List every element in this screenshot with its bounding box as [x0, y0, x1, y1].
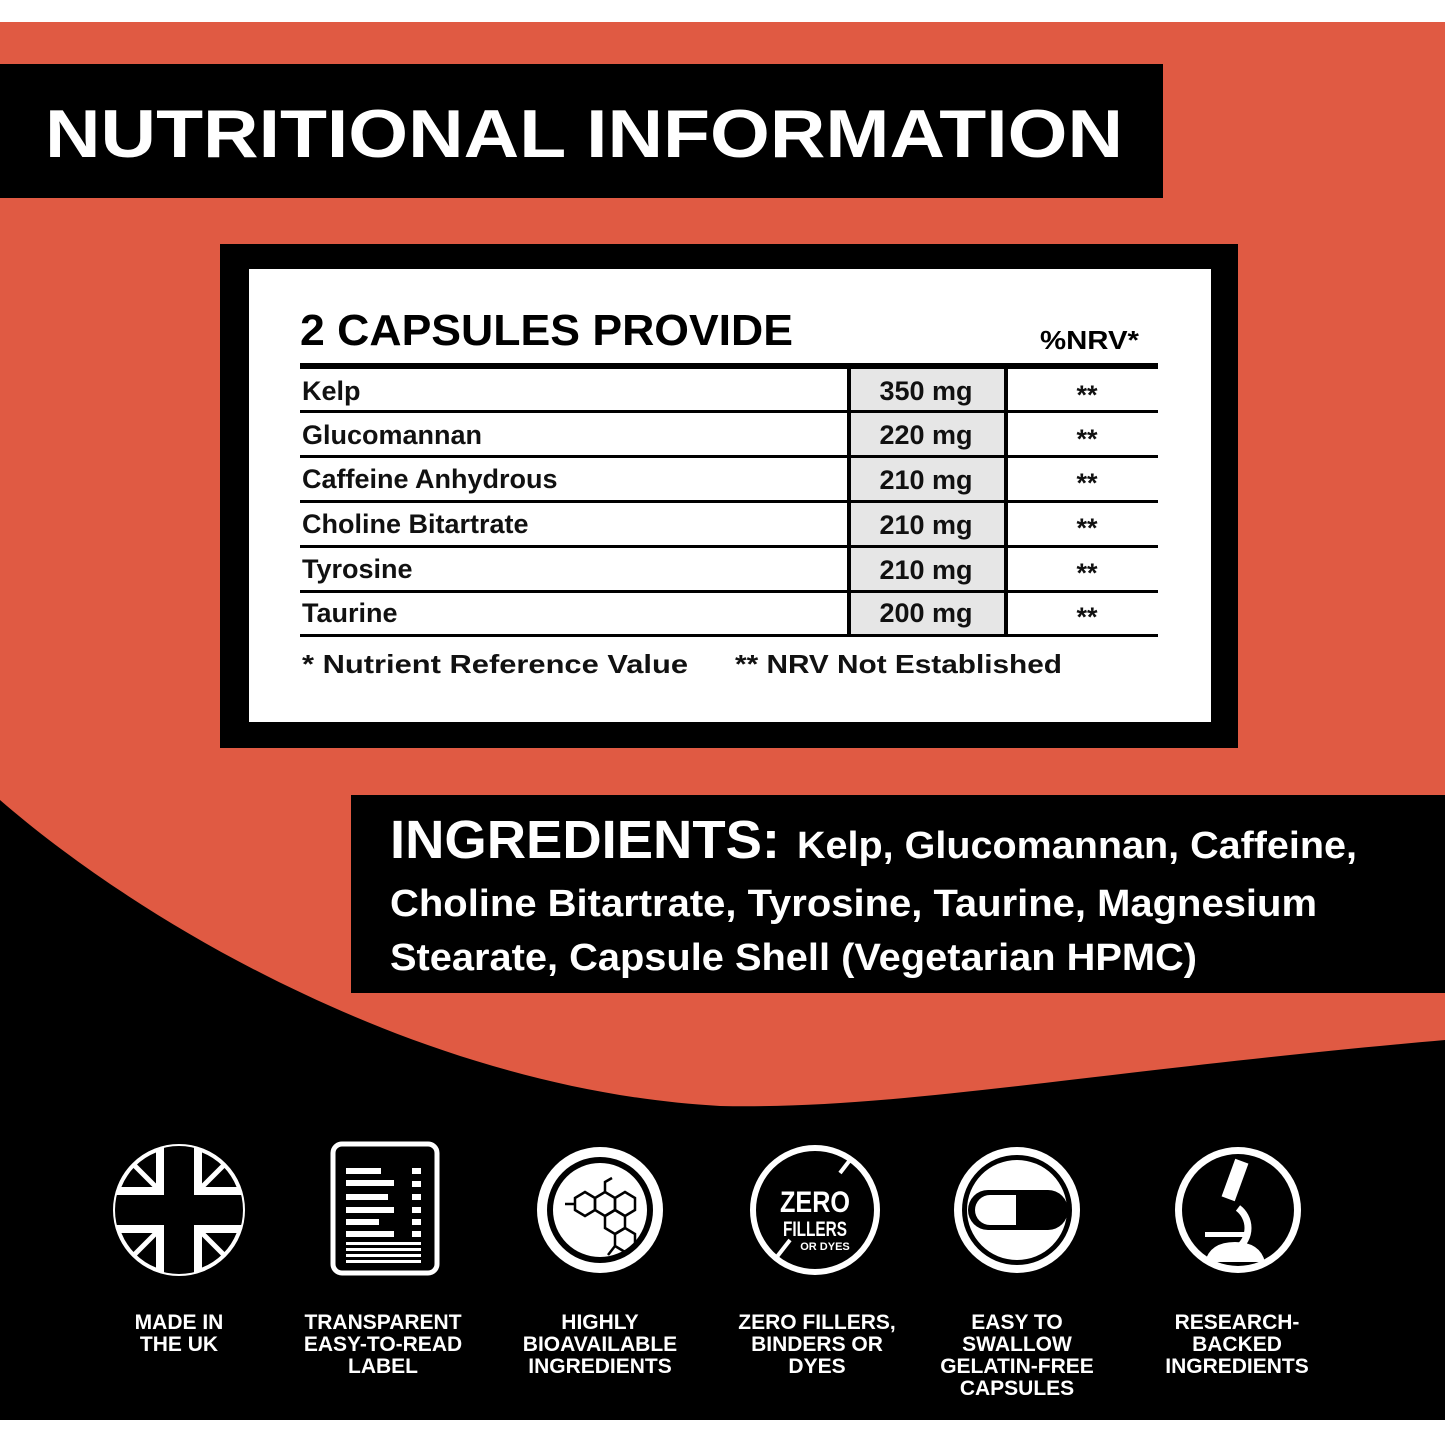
- feature labels: RESEARCH-: [1175, 1311, 1299, 1334]
- table rows: [302, 376, 1098, 632]
- panel: ingredients: INGREDIENTS:: [390, 810, 780, 870]
- title: [0, 64, 1163, 198]
- table heading: 2 CAPSULES PROVIDE: [300, 306, 793, 355]
- table rows: Taurine: [302, 598, 398, 628]
- table rows: Tyrosine: [302, 554, 413, 584]
- feature labels: INGREDIENTS: [1165, 1355, 1309, 1378]
- feature labels: [135, 1311, 1309, 1400]
- feature labels: EASY-TO-READ: [304, 1333, 462, 1356]
- icon: UK flag: [113, 1144, 245, 1276]
- feature labels: INGREDIENTS: [528, 1355, 672, 1378]
- table rows: Kelp: [302, 376, 361, 406]
- table rows: Caffeine Anhydrous: [302, 464, 558, 494]
- table rows: **: [1076, 602, 1098, 632]
- table rows: 200 mg: [879, 598, 973, 628]
- table rows: **: [1076, 513, 1098, 543]
- feature labels: TRANSPARENT: [304, 1311, 462, 1334]
- table rows: Choline Bitartrate: [302, 509, 529, 539]
- table rows: 350 mg: [879, 376, 973, 406]
- footnote: * Nutrient Reference Value: [302, 649, 688, 679]
- feature labels: DYES: [788, 1355, 846, 1378]
- panel: ingredients: Choline Bitartrate, Tyrosine, Taurine, Magnesium: [390, 883, 1317, 925]
- table rows: 210 mg: [879, 510, 973, 540]
- panel: ingredients: Stearate, Capsule Shell (Vegetarian HPMC): [390, 937, 1197, 979]
- feature labels: BACKED: [1192, 1333, 1282, 1356]
- feature labels: BIOAVAILABLE: [523, 1333, 677, 1356]
- icon: zero fillers: FILLERS: [783, 1218, 847, 1241]
- table rows: 210 mg: [879, 555, 973, 585]
- icon: microscope: [1175, 1147, 1301, 1273]
- title: NUTRITIONAL INFORMATION: [45, 96, 1123, 172]
- icon: zero fillers: ZERO: [780, 1186, 850, 1219]
- icon: zero fillers: [753, 1148, 877, 1272]
- table rows: 220 mg: [879, 420, 973, 450]
- feature labels: CAPSULES: [960, 1377, 1074, 1400]
- feature labels: MADE IN: [135, 1311, 223, 1334]
- nrv heading: %NRV*: [1040, 325, 1140, 355]
- feature labels: HIGHLY: [561, 1311, 639, 1334]
- table rows: Glucomannan: [302, 420, 482, 450]
- feature labels: BINDERS OR: [751, 1333, 883, 1356]
- feature labels: LABEL: [348, 1355, 418, 1378]
- icon: capsule: [954, 1147, 1080, 1273]
- table rows: **: [1076, 380, 1098, 410]
- panel: nutrition table: ** NRV Not Established: [735, 649, 1062, 679]
- table rows: **: [1076, 424, 1098, 454]
- table rows: **: [1076, 558, 1098, 588]
- table rows: 210 mg: [879, 465, 973, 495]
- table rows: **: [1076, 468, 1098, 498]
- feature labels: GELATIN-FREE: [940, 1355, 1094, 1378]
- icon: zero fillers: OR DYES: [800, 1241, 850, 1253]
- icon: molecule: [537, 1147, 663, 1273]
- feature labels: ZERO FILLERS,: [738, 1311, 896, 1334]
- icon: label: [333, 1144, 437, 1273]
- black wave: [0, 800, 1445, 1420]
- feature labels: THE UK: [140, 1333, 218, 1356]
- panel: ingredients: [351, 795, 1445, 993]
- panel: nutrition table: [220, 244, 1238, 748]
- feature labels: SWALLOW: [962, 1333, 1072, 1356]
- feature labels: EASY TO: [971, 1311, 1063, 1334]
- panel: ingredients: Kelp, Glucomannan, Caffeine,: [797, 825, 1357, 867]
